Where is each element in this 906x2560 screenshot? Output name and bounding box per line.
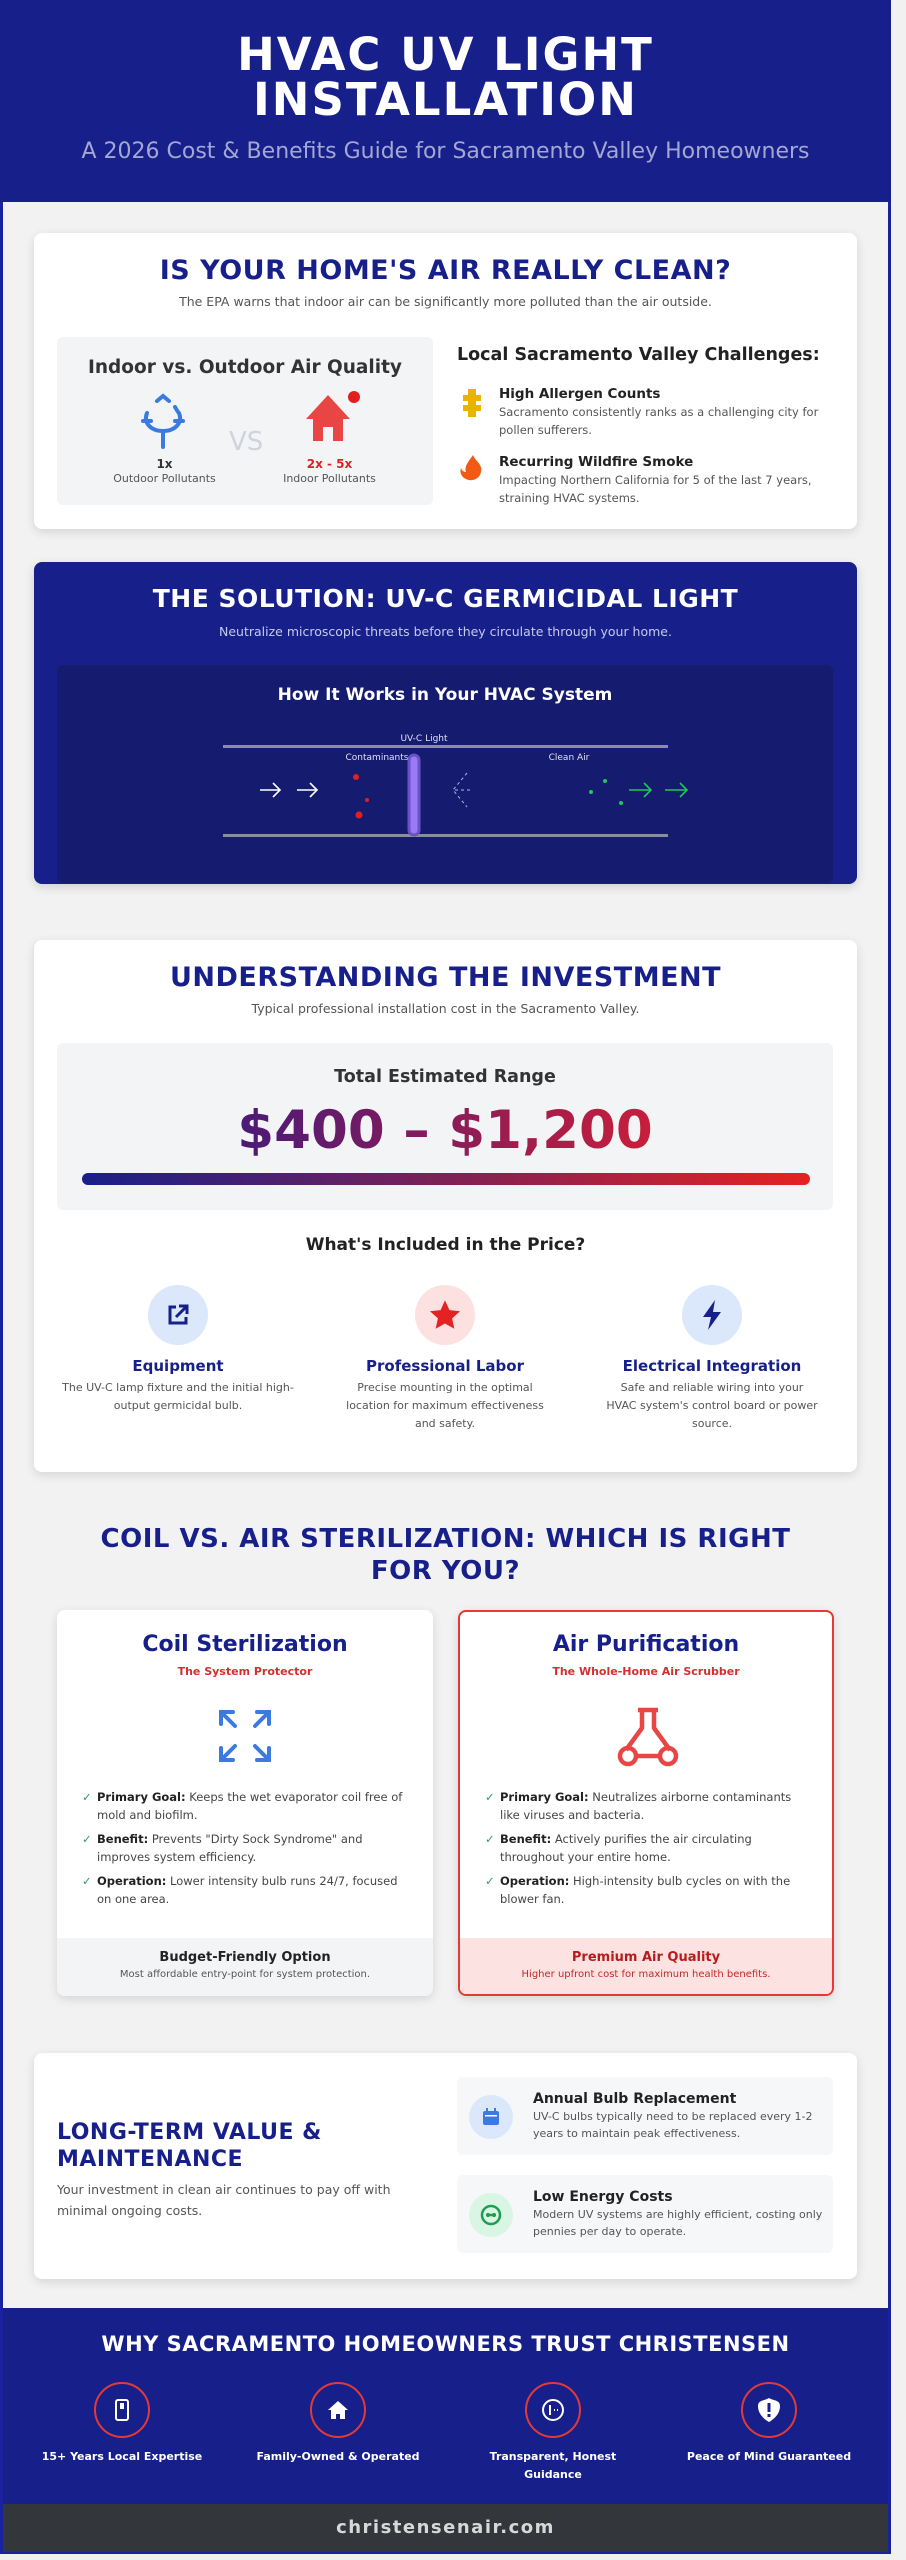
vs: VS	[229, 427, 263, 457]
item: allergen	[499, 386, 818, 437]
item: labor: Precise mounting in the optimal location for maximum effectiveness and safety.	[346, 1381, 544, 1430]
trust item 4	[687, 2382, 851, 2463]
item: wildfire: Impacting Northern California for 5 of the last 7 years, straining HVAC systems.	[499, 473, 812, 505]
heading: LONG-TERM VALUE & MAINTENANCE	[57, 2120, 322, 2172]
heading: coil vs air: COIL VS. AIR STERILIZATION: WHICH IS RIGHT FOR YOU?	[101, 1524, 790, 1586]
item: bulb replacement	[457, 2077, 833, 2155]
footer: trust	[3, 2308, 888, 2504]
panel: air purification	[458, 1610, 834, 1996]
diagram: duct: UV-C Light	[400, 734, 448, 744]
diagram: duct: Clean Air	[549, 753, 590, 763]
item: allergen: Sacramento consistently ranks as a challenging city for pollen sufferers.	[499, 405, 818, 437]
panel: coil sterilization: Benefit: Prevents "Dirty Sock Syndrome" and improves system efficiency.	[97, 1832, 363, 1864]
subtitle: A 2026 Cost & Benefits Guide for Sacramento Valley Homeowners	[81, 139, 810, 164]
trust item 2	[256, 2382, 420, 2463]
comparison title: Indoor vs. Outdoor Air Quality	[88, 357, 402, 378]
footer band: Budget-Friendly Option	[159, 1950, 331, 1965]
icon: calendar	[469, 2095, 513, 2139]
heading: THE SOLUTION: UV-C GERMICIDAL LIGHT	[153, 584, 738, 613]
diagram title: How It Works in Your HVAC System	[278, 685, 612, 705]
panel: air quality	[34, 233, 857, 529]
item: energy: Modern UV systems are highly efficient, costing only pennies per day to operate.	[533, 2208, 822, 2238]
panel: coil sterilization: ✓	[82, 1832, 92, 1846]
panel: coil sterilization: The System Protector	[178, 1665, 312, 1678]
footer band: Most affordable entry-point for system protection.	[120, 1969, 370, 1980]
heading: UNDERSTANDING THE INVESTMENT	[170, 962, 721, 993]
title: INSTALLATION	[253, 73, 638, 126]
text: Your investment in clean air continues to pay off with minimal ongoing costs.	[57, 2182, 391, 2218]
trust item 2: Family-Owned & Operated	[256, 2450, 420, 2463]
item: bulb replacement: Annual Bulb Replacement	[533, 2091, 736, 2107]
icon: star	[415, 1285, 475, 1345]
footer: website: christensenair.com	[336, 2517, 555, 2538]
stat outdoor: 1x	[156, 457, 173, 471]
price box	[57, 1043, 833, 1210]
panel: long-term value	[34, 2053, 857, 2279]
icon: expand	[218, 1710, 272, 1762]
panel: air purification: ✓	[485, 1874, 495, 1888]
trust item 4: Peace of Mind Guaranteed	[687, 2450, 851, 2463]
title	[237, 28, 654, 126]
panel: air purification: ✓	[485, 1832, 495, 1846]
stat indoor	[283, 457, 376, 485]
icon: energy	[469, 2193, 513, 2237]
comparison box	[57, 337, 433, 505]
trust item 3	[490, 2382, 616, 2481]
heading: IS YOUR HOME'S AIR REALLY CLEAN?	[160, 255, 731, 286]
icon: allergen	[463, 389, 481, 417]
icon: equipment	[148, 1285, 208, 1345]
footer band: Higher upfront cost for maximum health benefits.	[522, 1969, 770, 1980]
footer: website	[3, 2504, 888, 2552]
footer band	[57, 1938, 433, 1996]
trust item 1	[42, 2382, 202, 2463]
diagram box	[57, 665, 833, 883]
icon: flask	[618, 1708, 678, 1766]
item: labor: Professional Labor	[366, 1357, 524, 1375]
item: energy: Low Energy Costs	[533, 2189, 673, 2205]
panel: solution	[34, 562, 857, 884]
title: HVAC UV LIGHT	[237, 28, 654, 81]
subheading: Typical professional installation cost in the Sacramento Valley.	[252, 1001, 639, 1016]
panel: coil sterilization	[57, 1610, 433, 1996]
gradient bar	[82, 1173, 810, 1185]
item: bulb replacement: UV-C bulbs typically need to be replaced every 1-2 years to maintain peak effectiveness.	[533, 2110, 813, 2140]
item: wildfire	[499, 454, 812, 505]
item: allergen: High Allergen Counts	[499, 386, 660, 402]
price: $400 – $1,200	[237, 1100, 653, 1161]
bullets: Primary Goal: Keeps the wet evaporator coil free of mold and biofilm.	[97, 1790, 402, 1822]
panel: coil sterilization: Coil Sterilization	[142, 1632, 348, 1657]
item: equipment	[62, 1285, 294, 1412]
icon: fire	[460, 455, 482, 480]
trust heading: WHY SACRAMENTO HOMEOWNERS TRUST CHRISTENSEN	[101, 2332, 790, 2356]
item: equipment: Equipment	[132, 1357, 224, 1375]
subheading: Neutralize microscopic threats before they circulate through your home.	[219, 624, 672, 639]
item: equipment: The UV-C lamp fixture and the initial high-output germicidal bulb.	[62, 1381, 294, 1412]
stat indoor: 2x - 5x	[307, 457, 352, 471]
panel: air purification: Operation: High-intensity bulb cycles on with the blower fan.	[500, 1874, 790, 1906]
footer band: Premium Air Quality	[572, 1950, 720, 1965]
panel: coil sterilization: ✓	[82, 1790, 92, 1804]
diagram: duct: Contaminants	[346, 753, 409, 763]
panel: air purification: ✓	[485, 1790, 495, 1804]
icon: outdoor	[141, 394, 185, 449]
icon: bolt	[682, 1285, 742, 1345]
trust item 1: 15+ Years Local Expertise	[42, 2450, 202, 2463]
footer band	[460, 1938, 832, 1996]
stat outdoor	[113, 457, 216, 485]
challenges title: Local Sacramento Valley Challenges:	[457, 345, 820, 365]
panel: coil sterilization: Operation: Lower intensity bulb runs 24/7, focused on one area.	[97, 1874, 398, 1906]
trust item 3: Transparent, Honest	[490, 2450, 616, 2463]
stat indoor: Indoor Pollutants	[283, 472, 376, 485]
stat outdoor: Outdoor Pollutants	[113, 472, 216, 485]
item: energy	[457, 2175, 833, 2253]
panel: air purification: Primary Goal: Neutralizes airborne contaminants like viruses and bacteria.	[500, 1790, 791, 1822]
icon: house	[306, 391, 360, 441]
panel: air purification: Benefit: Actively purifies the air circulating throughout your entire home.	[500, 1832, 752, 1864]
item: wildfire: Recurring Wildfire Smoke	[499, 454, 693, 470]
item: electrical	[606, 1285, 818, 1430]
panel: air purification: Air Purification	[553, 1632, 739, 1657]
panel: air purification: The Whole-Home Air Scrubber	[552, 1665, 740, 1678]
header	[0, 0, 891, 202]
subheading: The EPA warns that indoor air can be significantly more polluted than the air outside.	[179, 294, 712, 309]
challenges	[457, 345, 820, 505]
included title: What's Included in the Price?	[306, 1235, 585, 1255]
panel: investment	[34, 940, 857, 1472]
trust item 3: Guidance	[524, 2468, 582, 2481]
item: electrical: Electrical Integration	[623, 1357, 801, 1375]
diagram: duct	[223, 734, 688, 837]
item: electrical: Safe and reliable wiring into your HVAC system's control board or power source.	[606, 1381, 818, 1430]
price label: Total Estimated Range	[334, 1067, 556, 1087]
panel: coil sterilization: ✓	[82, 1874, 92, 1888]
item: labor	[346, 1285, 544, 1430]
